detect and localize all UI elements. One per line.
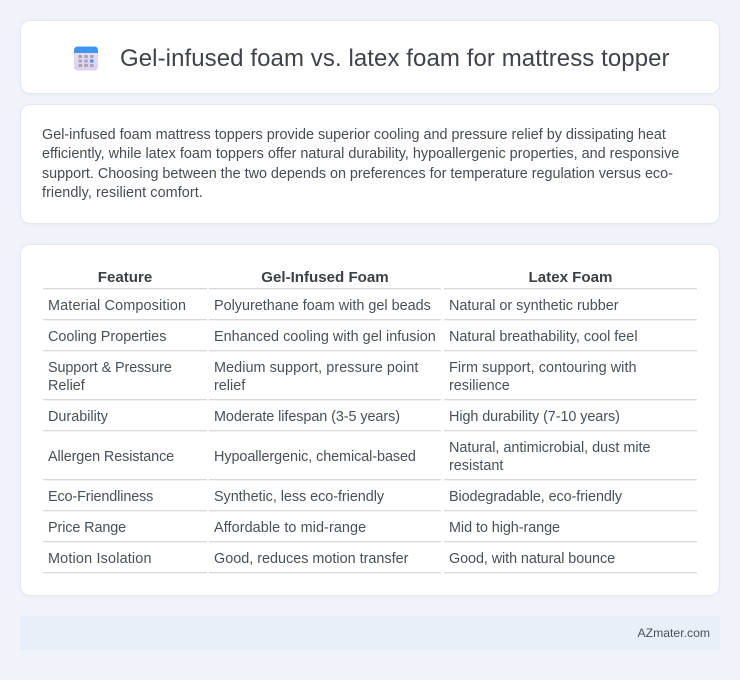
row: cooling properties: Cooling Properties	[48, 329, 166, 345]
row: allergen resistance: Allergen Resistance	[48, 449, 174, 465]
row: durability	[48, 409, 620, 425]
row: cooling properties	[48, 329, 638, 345]
row: support and pressure relief: Support & Pressure	[48, 360, 172, 376]
row: support and pressure relief	[48, 360, 637, 394]
row: price range	[48, 520, 560, 536]
title: Gel-infused foam vs. latex foam for mattress topper	[120, 45, 670, 72]
panel: title card	[20, 20, 720, 94]
panel: comparison table card	[20, 244, 720, 596]
row: allergen resistance: Hypoallergenic, chemical-based	[214, 449, 416, 465]
row: cooling properties: Natural breathability, cool feel	[449, 329, 638, 345]
row: allergen resistance: resistant	[449, 458, 503, 474]
header row: Feature	[98, 269, 152, 286]
row: durability: High durability (7-10 years)	[449, 409, 620, 425]
row: material composition: Polyurethane foam with gel beads	[214, 298, 431, 314]
row: motion isolation: Motion Isolation	[48, 551, 152, 567]
row: motion isolation: Good, reduces motion transfer	[214, 551, 408, 567]
row: price range: Mid to high-range	[449, 520, 560, 536]
row: eco-friendliness: Synthetic, less eco-friendly	[214, 489, 384, 505]
comparison table	[43, 269, 697, 574]
row: allergen resistance: Natural, antimicrobial, dust mite	[449, 440, 651, 456]
row: allergen resistance	[48, 440, 651, 474]
footer bar	[20, 616, 720, 650]
summary text: support. Choosing between the two depends on preferences for temperature regulation versus eco-	[42, 166, 673, 182]
row: motion isolation: Good, with natural bounce	[449, 551, 615, 567]
footer credit: AZmater.com	[638, 626, 710, 640]
summary text: efficiently, while latex foam toppers offer natural durability, hypoallergenic properties, and responsive	[42, 146, 679, 162]
row: durability: Moderate lifespan (3-5 years)	[214, 409, 400, 425]
row: eco-friendliness: Biodegradable, eco-friendly	[449, 489, 622, 505]
row: cooling properties: Enhanced cooling with gel infusion	[214, 329, 436, 345]
row: price range: Price Range	[48, 520, 126, 536]
row: material composition: Natural or synthetic rubber	[449, 298, 619, 314]
summary text: friendly, resilient comfort.	[42, 185, 203, 201]
row: support and pressure relief: resilience	[449, 378, 510, 394]
row: support and pressure relief: relief	[214, 378, 245, 394]
row: durability: Durability	[48, 409, 108, 425]
icon: calendar	[74, 46, 98, 70]
row: support and pressure relief: Medium support, pressure point	[214, 360, 418, 376]
summary text	[42, 127, 679, 201]
header row	[98, 269, 612, 286]
row: material composition	[48, 298, 619, 314]
header row: Gel-Infused Foam	[261, 269, 389, 286]
panel: summary card	[20, 104, 720, 224]
header row: Latex Foam	[529, 269, 612, 286]
row: support and pressure relief: Firm support, contouring with	[449, 360, 637, 376]
row: price range: Affordable to mid-range	[214, 520, 366, 536]
row: support and pressure relief: Relief	[48, 378, 85, 394]
summary text: Gel-infused foam mattress toppers provide superior cooling and pressure relief by dissipating heat	[42, 127, 666, 143]
row: eco-friendliness: Eco-Friendliness	[48, 489, 153, 505]
row: motion isolation	[48, 551, 615, 567]
row: material composition: Material Composition	[48, 298, 186, 314]
row: eco-friendliness	[48, 489, 622, 505]
